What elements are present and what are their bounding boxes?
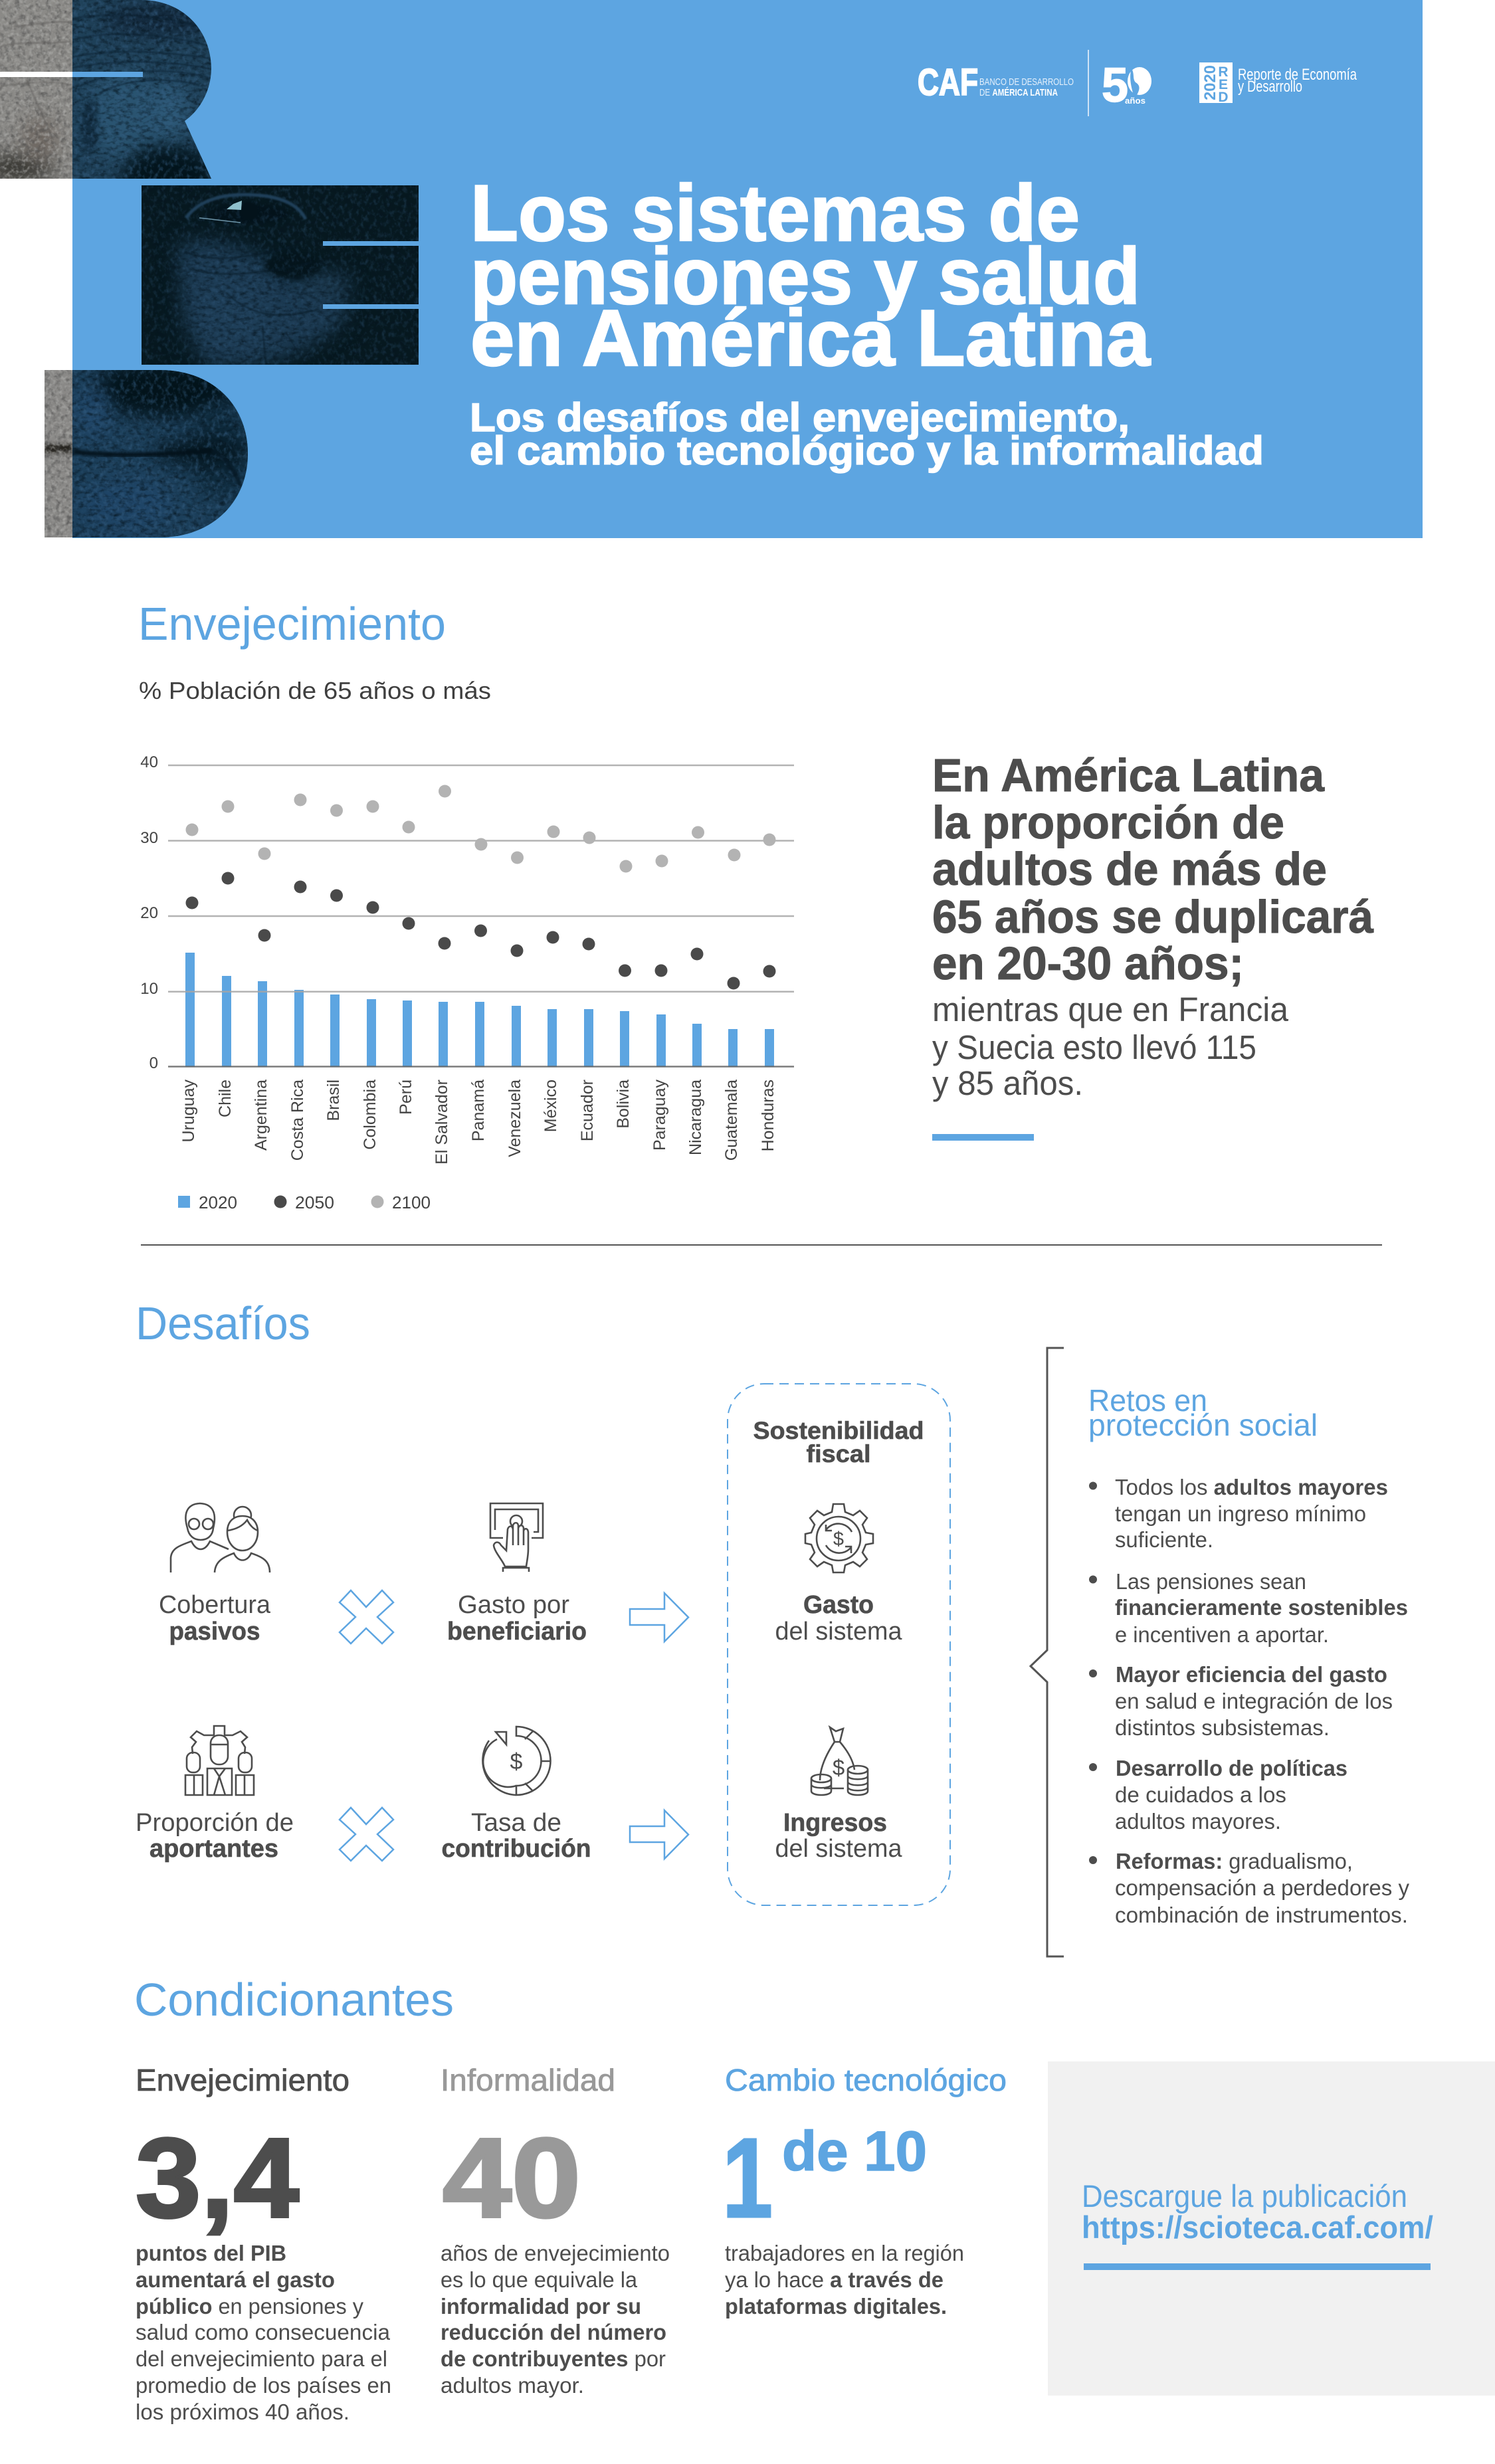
bullet list: e incentiven a aportar. <box>1115 1622 1329 1647</box>
bullet list: compensación a perdedores y <box>1115 1875 1409 1900</box>
y axis labels: 30 <box>140 829 158 847</box>
country labels: Honduras <box>759 1080 777 1151</box>
subtitle: el cambio tecnológico y la informalidad <box>470 428 1264 473</box>
bullet list: Desarrollo de políticas <box>1116 1756 1347 1780</box>
icon: gear with dollar <box>805 1504 873 1572</box>
panel heading <box>1088 1383 1318 1442</box>
country labels <box>179 1080 777 1165</box>
key message: mientras que en Francia <box>932 991 1289 1028</box>
text: Tasa de contribución <box>441 1809 591 1863</box>
logo: RED 2020: Reporte de Economía <box>1238 66 1357 84</box>
logo: RED 2020: 2020 <box>1201 65 1219 100</box>
bullet list: financieramente sostenibles <box>1115 1595 1408 1620</box>
text: Cobertura pasivos: pasivos <box>169 1618 260 1646</box>
main title: pensiones y salud <box>470 232 1140 321</box>
key message: 65 años se duplicará <box>932 891 1374 943</box>
logo: RED 2020: R <box>1218 64 1229 80</box>
column: Informalidad: 40 <box>443 2115 581 2241</box>
y axis labels <box>140 753 158 1072</box>
bullet list: suficiente. <box>1115 1527 1213 1552</box>
main title: Los sistemas de <box>470 169 1080 258</box>
bullet list: distintos subsistemas. <box>1115 1715 1330 1740</box>
text: Proporción de aportantes: aportantes <box>150 1835 278 1863</box>
column: Cambio tecnológico: Cambio tecnológico <box>725 2063 1007 2097</box>
heading: Envejecimiento: Envejecimiento <box>138 598 446 650</box>
column: Envejecimiento: del envejecimiento para el <box>136 2346 387 2371</box>
chart: population over 65 by country <box>140 753 794 1212</box>
bullet list: de cuidados a los <box>1115 1782 1286 1807</box>
text: Gasto por beneficiario: Gasto por <box>458 1591 569 1619</box>
photo letter D <box>45 359 249 537</box>
logo: CAF: BANCO DE DESARROLLO <box>979 76 1074 88</box>
text: Gasto por beneficiario <box>447 1591 587 1646</box>
logo: 50 años: 5 <box>1102 58 1128 112</box>
bullet list: combinación de instrumentos. <box>1115 1903 1408 1927</box>
column: Informalidad <box>441 2063 670 2398</box>
country labels: Panamá <box>469 1080 488 1141</box>
country labels: Colombia <box>361 1080 379 1150</box>
country labels: Perú <box>397 1080 415 1115</box>
icon: multiply <box>340 1590 393 1644</box>
icon: banknote and hand <box>490 1503 543 1572</box>
column: Envejecimiento: aumentará el gasto <box>136 2267 335 2292</box>
column: Envejecimiento: los próximos 40 años. <box>136 2400 349 2424</box>
column: Envejecimiento: 3,4 <box>136 2115 299 2241</box>
arrow <box>630 1593 688 1642</box>
column: Informalidad: adultos mayor. <box>441 2373 584 2398</box>
icon: multiply <box>340 1808 393 1861</box>
chart subtitle: % Población de 65 años o más <box>139 677 491 704</box>
country labels: México <box>542 1080 560 1132</box>
text: Proporción de aportantes <box>136 1809 294 1863</box>
icon: circular contribution rate <box>482 1727 551 1795</box>
y axis labels: 10 <box>140 980 158 998</box>
panel: sostenibilidad fiscal dashed box: fiscal <box>807 1440 870 1468</box>
column: Envejecimiento: Envejecimiento <box>136 2063 349 2097</box>
column: Envejecimiento <box>136 2063 391 2424</box>
column: Informalidad: Informalidad <box>441 2063 615 2097</box>
icon: money bag and coins <box>811 1727 868 1795</box>
text: Ingresos del sistema: del sistema <box>775 1835 902 1863</box>
arrow <box>630 1810 688 1859</box>
logo: 50 años <box>1102 58 1151 112</box>
column: Informalidad: reducción del número <box>441 2320 666 2344</box>
column: Envejecimiento: salud como consecuencia <box>136 2320 391 2344</box>
panel heading: protección social <box>1088 1408 1318 1442</box>
key message: adultos de más de <box>932 843 1327 895</box>
column: Envejecimiento: público en pensiones y <box>136 2294 363 2319</box>
y axis labels: 0 <box>150 1054 158 1072</box>
photo letter E <box>142 185 419 365</box>
column: Envejecimiento: puntos del PIB <box>136 2241 286 2265</box>
chart legend: 2100 <box>392 1192 431 1212</box>
bullet list: Las pensiones sean <box>1116 1569 1306 1594</box>
text: Gasto del sistema <box>775 1591 902 1646</box>
panel: download: https://scioteca.caf.com/ <box>1082 2210 1433 2245</box>
column: Informalidad: de contribuyentes por <box>441 2346 666 2371</box>
logo: RED 2020: y Desarrollo <box>1238 78 1302 96</box>
dots 2100 <box>186 785 776 873</box>
logo: RED 2020: E <box>1219 77 1228 92</box>
column: Cambio tecnológico <box>722 2063 1007 2319</box>
country labels: Venezuela <box>506 1080 524 1157</box>
chart legend: 2050 <box>295 1192 334 1212</box>
country labels: Chile <box>216 1080 235 1117</box>
text: Ingresos del sistema: Ingresos <box>783 1809 887 1837</box>
key message: y Suecia esto llevó 115 <box>932 1028 1256 1066</box>
panel: download <box>1048 2061 1495 2396</box>
country labels: Ecuador <box>578 1080 597 1141</box>
column: Cambio tecnológico: 1 <box>722 2115 773 2241</box>
country labels: Argentina <box>252 1080 270 1151</box>
chart legend: 2020 <box>199 1192 237 1212</box>
text: Ingresos del sistema <box>775 1809 902 1863</box>
country labels: Brasil <box>324 1080 343 1121</box>
bullet list: en salud e integración de los <box>1115 1689 1393 1713</box>
icon: elderly couple <box>171 1503 270 1572</box>
bracket <box>1031 1348 1064 1956</box>
text: Gasto por beneficiario: beneficiario <box>447 1618 587 1646</box>
key message <box>932 749 1374 1141</box>
icon: circular contribution rate: $ <box>510 1749 523 1774</box>
heading: Desafíos: Desafíos <box>136 1297 310 1349</box>
text: Cobertura pasivos: Cobertura <box>159 1591 271 1619</box>
country labels: Guatemala <box>722 1080 741 1161</box>
panel: retos en protección social <box>1088 1383 1409 1927</box>
country labels: Costa Rica <box>288 1080 307 1161</box>
column: Envejecimiento: promedio de los países en <box>136 2373 391 2398</box>
key message: y 85 años. <box>932 1064 1083 1102</box>
panel: sostenibilidad fiscal dashed box <box>728 1384 950 1905</box>
country labels: Uruguay <box>179 1080 198 1143</box>
country labels: El Salvador <box>433 1080 451 1165</box>
logo: RED 2020: D <box>1218 90 1229 105</box>
bullet list: adultos mayores. <box>1115 1809 1281 1834</box>
key message: En América Latina <box>932 749 1325 801</box>
icon: money bag and coins: $ <box>833 1755 845 1780</box>
column: Cambio tecnológico: trabajadores en la región <box>725 2241 964 2265</box>
logo: CAF <box>918 61 1074 104</box>
column: Cambio tecnológico: de 10 <box>782 2120 927 2182</box>
icon: gear with dollar: $ <box>833 1529 844 1550</box>
text: Gasto del sistema: del sistema <box>775 1618 902 1646</box>
dots 2050 <box>186 872 776 990</box>
bullet list <box>1089 1475 1409 1927</box>
photo letter R <box>0 0 211 179</box>
heading: Condicionantes: Condicionantes <box>134 1974 454 2026</box>
main title: en América Latina <box>470 294 1151 383</box>
bullet list: Todos los adultos mayores <box>1115 1475 1388 1499</box>
panel heading: Retos en <box>1088 1383 1207 1418</box>
panel: sostenibilidad fiscal dashed box: Sostenibilidad <box>753 1417 924 1444</box>
text: Tasa de contribución: Tasa de <box>471 1809 561 1837</box>
icon: group of contributors <box>185 1726 254 1795</box>
text: Tasa de contribución: contribución <box>441 1835 591 1863</box>
column: Cambio tecnológico: ya lo hace a través de <box>725 2267 944 2292</box>
column: Informalidad: es lo que equivale la <box>441 2267 638 2292</box>
main title <box>470 169 1151 383</box>
grid lines <box>168 765 794 1067</box>
chart legend <box>178 1192 431 1212</box>
logo divider <box>1088 50 1089 116</box>
bars 2020 <box>185 953 774 1067</box>
text: Gasto del sistema: Gasto <box>803 1591 874 1619</box>
key message: la proporción de <box>932 797 1284 848</box>
header banner <box>0 0 1423 538</box>
bullet list: Reformas: gradualismo, <box>1116 1849 1353 1873</box>
text: Cobertura pasivos <box>159 1591 271 1646</box>
text: Proporción de aportantes: Proporción de <box>136 1809 294 1837</box>
country labels: Paraguay <box>650 1080 669 1151</box>
column: Informalidad: años de envejecimiento <box>441 2241 670 2265</box>
subtitle <box>470 395 1264 473</box>
bullet list: tengan un ingreso mínimo <box>1115 1501 1366 1526</box>
country labels: Nicaragua <box>686 1080 705 1155</box>
panel: download: Descargue la publicación <box>1082 2178 1407 2214</box>
y axis labels: 40 <box>140 753 158 771</box>
column: Informalidad: informalidad por su <box>441 2294 641 2319</box>
y axis labels: 20 <box>140 904 158 922</box>
logo: 50 años: años <box>1125 96 1146 106</box>
subtitle: Los desafíos del envejecimiento, <box>470 395 1130 440</box>
column: Cambio tecnológico: plataformas digitales. <box>725 2294 947 2319</box>
country labels: Bolivia <box>614 1080 633 1129</box>
bullet list: Mayor eficiencia del gasto <box>1116 1662 1387 1687</box>
logo: RED 2020 <box>1199 62 1357 105</box>
key message: en 20-30 años; <box>932 937 1244 989</box>
logo: CAF: CAF <box>918 61 978 104</box>
logo: CAF: DE AMÉRICA LATINA <box>979 87 1058 98</box>
